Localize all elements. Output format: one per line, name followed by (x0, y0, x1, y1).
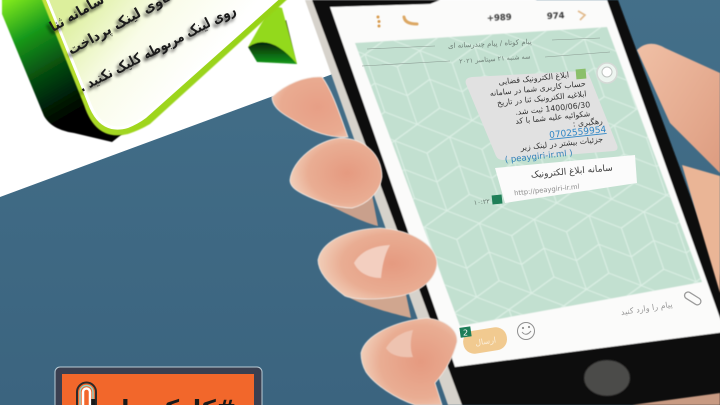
skin below phone (632, 393, 720, 405)
chat background (355, 27, 702, 326)
finger 1 (272, 77, 348, 137)
input placeholder: پیام را وارد کنید (620, 300, 673, 317)
bubble face (44, 0, 284, 130)
phone black body (312, 0, 720, 405)
chat background cube pattern (355, 27, 702, 326)
SIM badge count (459, 326, 472, 338)
hand: fingers (272, 44, 720, 405)
speech bubble (2, 0, 297, 142)
bubble 3D side (2, 0, 130, 142)
icon: sender avatar (597, 63, 617, 83)
message time and SIM badge (473, 194, 502, 207)
icon: paperclip (683, 291, 702, 306)
palm lower (682, 165, 720, 293)
panel: smartphone (305, 0, 720, 405)
message text: ابلاغ الکترونیک قضایی (498, 70, 569, 87)
message text: 1400/06/30 ثبت شد. (515, 100, 591, 117)
message text (489, 70, 604, 152)
icon: home button (584, 360, 630, 396)
chat date heading (362, 38, 610, 66)
header bar (376, 11, 585, 28)
phone silver frame (305, 0, 470, 405)
date label: سه شنبه ۲۱ سپتامبر ۲۰۲۱ (459, 53, 531, 65)
message bubble (466, 69, 618, 166)
icon: arch logo (77, 382, 96, 405)
SIM badge count: 2 (463, 328, 468, 338)
bubble rim (40, 0, 292, 135)
message text: حساب کاربری شما در سامانه (489, 79, 586, 98)
icon: smiley (518, 322, 534, 340)
link preview card (495, 155, 637, 203)
palm upper (637, 44, 720, 173)
icon: envelope badge (576, 69, 586, 79)
chat type label: پیام کوتاه / پیام چندرسانه ای (448, 38, 532, 50)
SIM badge (492, 194, 502, 204)
card title: سامانه ابلاغ الکترونیک (530, 163, 613, 181)
icon: chevron (578, 11, 585, 20)
icon: phone handset (404, 17, 417, 24)
input bar (459, 291, 702, 355)
phone white front (330, 0, 720, 367)
bubble inner (47, 0, 278, 126)
card url: http://peaygiri-ir.ml (514, 183, 580, 197)
message text: رهگیری : (572, 116, 603, 129)
icon: menu dots (376, 16, 380, 28)
bubble tail (248, 5, 297, 64)
finger 2 (290, 138, 382, 208)
finger 4 nail (386, 330, 413, 357)
bottom-left orange card (55, 367, 262, 405)
finger 3 underside (350, 285, 411, 318)
message text: شکوائیه علیه شما با کد (515, 109, 591, 126)
bubble background (466, 71, 618, 160)
finger 4 (361, 318, 457, 405)
time: ۱۰:۲۲ (473, 197, 491, 207)
card background (495, 155, 637, 203)
message text: جزئیات بیشتر در لینک زیر (519, 135, 604, 152)
message text: ابلاغیه الکترونیک ثنا در تاریخ (497, 89, 587, 108)
finger 2 underside (310, 190, 378, 226)
send button (462, 326, 509, 355)
send label: ارسال (475, 335, 497, 348)
message link: ( peaygiri-ir.ml ) (504, 148, 573, 166)
finger 3 nail (354, 245, 390, 278)
card frame (55, 367, 262, 405)
phone number end: 974 (547, 11, 565, 22)
tracking number link: 0702559954 (549, 125, 607, 141)
phone number: +989 (487, 13, 512, 24)
card orange panel (62, 374, 254, 405)
finger 3 (318, 228, 437, 299)
